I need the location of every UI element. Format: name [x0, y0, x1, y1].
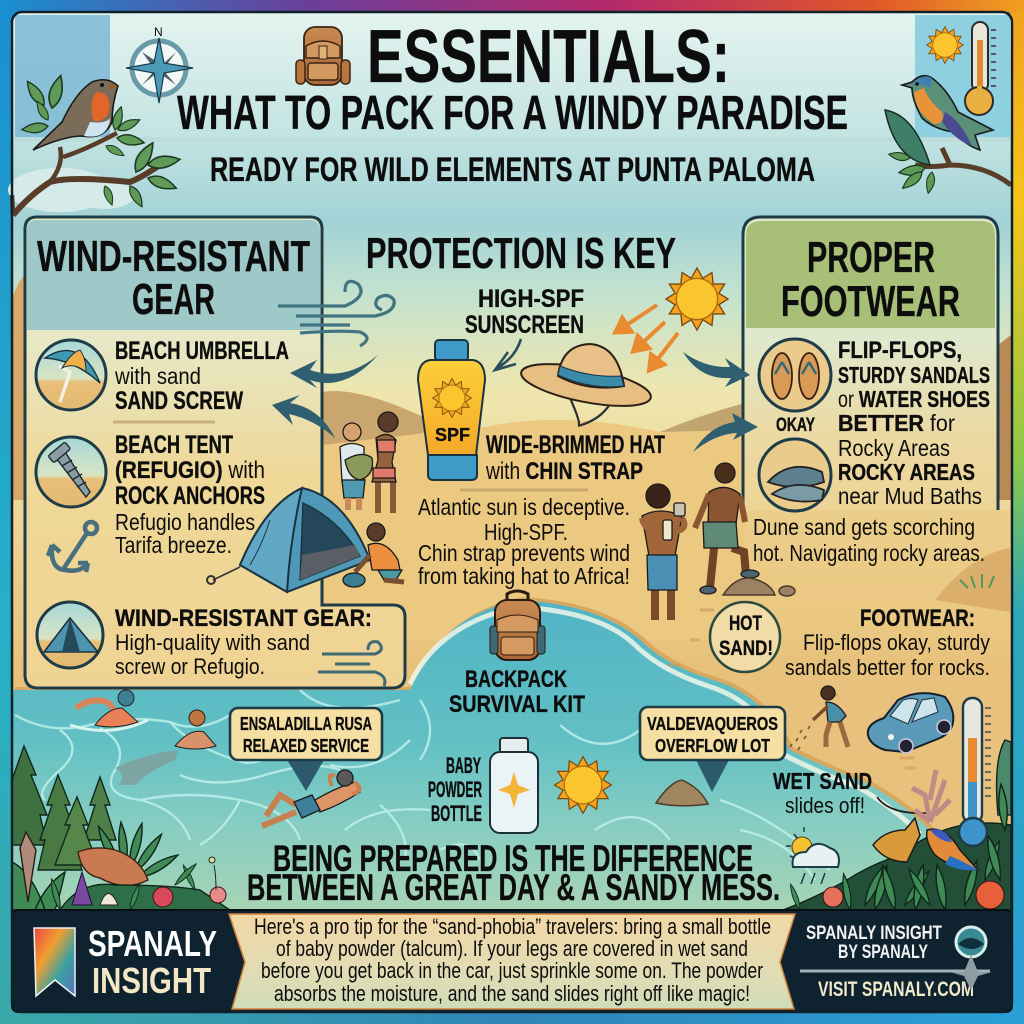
- text: being prepared statement: BETWEEN A GREAT DAY & A SANDY MESS.: [247, 867, 780, 908]
- icon: thermometer right: [959, 698, 991, 846]
- text: wet sand slides off: WET SAND: [773, 768, 872, 794]
- text: beach tent: ROCK ANCHORS: [115, 482, 265, 510]
- text: beach tent: Tarifa breeze.: [115, 532, 232, 558]
- heading: protection is key: PROTECTION IS KEY: [366, 229, 676, 278]
- logo: spanaly circular mark: [950, 927, 992, 990]
- text: wide-brimmed hat: with CHIN STRAP: [485, 458, 643, 485]
- icon: sun over water: [555, 757, 611, 813]
- illustration: bird on branch right: [885, 76, 1011, 194]
- callout: valdevaqueros overflow lot: VALDEVAQUEROS: [647, 714, 778, 734]
- text: beach umbrella: SAND SCREW: [115, 387, 243, 415]
- text: spanaly insight wordmark: [88, 923, 217, 1001]
- icon: backpack in title: [296, 27, 350, 85]
- callout: wind-resistant gear summary: [37, 602, 385, 686]
- arrows: to footwear items: [683, 352, 758, 452]
- text: footwear list: BETTER for: [838, 410, 955, 436]
- callout: hot sand badge: [710, 602, 780, 672]
- text: backpack survival kit: SURVIVAL KIT: [449, 691, 585, 718]
- arrows: sun rays to hat: [622, 305, 678, 364]
- text: wide-brimmed hat: [485, 431, 665, 485]
- text: spanaly insight credit: [800, 923, 990, 1001]
- text: beach umbrella: with sand: [114, 363, 201, 389]
- illustration: person walking on rocks: [695, 463, 759, 594]
- panel: wind-resistant gear: [25, 217, 405, 688]
- logo: spanaly insight ribbon: [34, 928, 75, 996]
- illustration: person sprinkling powder: [790, 686, 848, 750]
- illustration: pine trees and plants left: [12, 746, 230, 911]
- illustration: person anchoring tent: [343, 523, 404, 587]
- illustration: tropical fish: [873, 818, 978, 870]
- illustration: person applying sunscreen: [642, 484, 685, 620]
- text: footwear summary: [785, 605, 990, 680]
- panel: pro tip parchment: of baby powder (talcum). If your legs are covered in wet sand: [276, 936, 748, 961]
- icon: wide-brimmed hat: [518, 344, 654, 426]
- text: footwear list: FLIP-FLOPS,: [838, 337, 962, 364]
- illustration: rock in water: [656, 780, 708, 806]
- icon: small wind: [318, 642, 385, 686]
- callout: valdevaqueros overflow lot: OVERFLOW LOT: [655, 736, 770, 756]
- text: beach tent: [115, 431, 265, 558]
- callout: wind-resistant gear summary: WIND-RESISTANT GEAR:: [115, 605, 372, 632]
- callout: ensaladilla rusa: ENSALADILLA RUSA: [240, 714, 372, 734]
- illustration: coral fish and plants right: [783, 740, 1011, 911]
- text: high-spf sunscreen: [465, 285, 584, 339]
- text: footwear list: Rocky Areas: [838, 435, 950, 461]
- illustration: rocks: [723, 578, 795, 596]
- text: being prepared statement: [247, 838, 780, 908]
- heading: ready for wild elements: READY FOR WILD ELEMENTS AT PUNTA PALOMA: [210, 151, 815, 189]
- illustration: floating person: [262, 770, 360, 826]
- illustration: blue tent: [207, 488, 370, 592]
- footer bar: [12, 910, 1012, 1012]
- text: being prepared statement: BEING PREPARED IS THE DIFFERENCE: [273, 838, 753, 879]
- heading: proper footwear: [781, 233, 960, 326]
- text: high-spf sunscreen: SUNSCREEN: [465, 311, 584, 339]
- text: atlantic sun note: Atlantic sun is deceptive.: [418, 494, 630, 520]
- text: footwear list: near Mud Baths: [838, 483, 982, 509]
- callout: ensaladilla rusa: [230, 708, 382, 791]
- icon: sunscreen bottle: SPF: [435, 425, 470, 445]
- text: spanaly insight wordmark: INSIGHT: [92, 960, 211, 1001]
- panel: pro tip parchment: before you get back in the car, just sprinkle some on. The powder: [261, 958, 763, 983]
- heading: wind-resistant gear: [37, 232, 310, 324]
- text: baby powder bottle label: POWDER: [428, 777, 482, 802]
- illustration: sun and thermometer top right: [927, 22, 996, 115]
- icon: sunscreen bottle: [418, 340, 485, 480]
- text: backpack survival kit: BACKPACK: [465, 666, 567, 693]
- illustration: blue car: [868, 693, 953, 753]
- text: spanaly insight credit: BY SPANALY: [838, 942, 928, 963]
- callout: hot sand badge: SAND!: [719, 637, 773, 660]
- icon: sturdy sandals: [759, 439, 831, 511]
- text: spanaly insight credit: VISIT SPANALY.COM: [818, 978, 974, 1001]
- text: atlantic sun note: Chin strap prevents wind: [418, 540, 630, 566]
- heading: wind-resistant gear: WIND-RESISTANT: [37, 232, 310, 281]
- text: atlantic sun note: [418, 494, 630, 589]
- text: beach tent: (REFUGIO) with: [115, 457, 265, 484]
- text: footwear list: [838, 337, 990, 509]
- text: wide-brimmed hat: WIDE-BRIMMED HAT: [486, 431, 665, 459]
- panel: proper footwear: [743, 217, 998, 511]
- text: footwear list: or WATER SHOES: [838, 386, 990, 412]
- heading: wind-resistant gear: GEAR: [132, 275, 215, 324]
- text: okay label: OKAY: [776, 415, 815, 436]
- text: dune sand note: Dune sand gets scorching: [753, 514, 975, 540]
- text: footwear summary: sandals better for rocks.: [785, 655, 990, 680]
- text: beach tent: BEACH TENT: [115, 431, 233, 459]
- icon: compass: N: [154, 25, 163, 39]
- icon: flip-flops: [759, 339, 831, 411]
- icon: baby powder bottle: [490, 738, 538, 833]
- callout: ensaladilla rusa: RELAXED SERVICE: [243, 736, 369, 756]
- title block: [177, 14, 848, 189]
- icon: mini tent: [37, 602, 103, 668]
- text: atlantic sun note: from taking hat to Africa!: [418, 563, 630, 589]
- icon: anchor: [48, 522, 97, 572]
- text: spanaly insight credit: SPANALY INSIGHT: [806, 923, 942, 944]
- illustration: robin on branch left: [12, 74, 181, 215]
- text: spanaly insight wordmark: SPANALY: [88, 923, 217, 964]
- callout: wind-resistant gear summary: High-quality with sand: [115, 630, 310, 655]
- text: beach tent: Refugio handles: [115, 509, 255, 535]
- text: beach umbrella: [114, 337, 289, 415]
- text: dune sand note: [753, 514, 985, 566]
- text: atlantic sun note: High-SPF.: [484, 519, 568, 545]
- callout: valdevaqueros overflow lot: [640, 707, 785, 792]
- text: baby powder bottle label: BOTTLE: [431, 801, 482, 826]
- illustration: swimmers: [70, 690, 216, 785]
- icon: sun cloud and rain: [786, 827, 839, 884]
- icon: compass: [126, 25, 193, 103]
- text: footwear summary: FOOTWEAR:: [860, 605, 975, 632]
- icon: wind swirl: [278, 281, 394, 346]
- text: beach umbrella: BEACH UMBRELLA: [115, 337, 289, 365]
- icon: beach umbrella: [36, 340, 106, 410]
- text: footwear list: ROCKY AREAS: [838, 459, 975, 485]
- icon: backpack survival kit: [490, 591, 545, 660]
- text: high-spf sunscreen: HIGH-SPF: [478, 285, 584, 313]
- text: baby powder bottle label: [428, 753, 482, 826]
- illustration: couple packing: [340, 412, 398, 513]
- panel: pro tip parchment: Here's a pro tip for the “sand-phobia” travelers: bring a small bottle: [254, 914, 771, 939]
- text: wet sand slides off: slides off!: [785, 793, 865, 818]
- text: footwear summary: Flip-flops okay, sturdy: [803, 630, 990, 655]
- heading: proper footwear: PROPER: [807, 233, 935, 282]
- panel: pro tip parchment: [229, 914, 795, 1009]
- arrow: sunscreen label to bottle: [495, 339, 521, 370]
- text: baby powder bottle label: BABY: [446, 753, 481, 778]
- text: backpack survival kit: [449, 666, 585, 718]
- arrows: to gear items: [272, 355, 378, 438]
- panel: pro tip parchment: absorbs the moisture, and the sand slides right off like magic!: [274, 981, 750, 1006]
- heading: ESSENTIALS: ESSENTIALS:: [367, 14, 730, 98]
- callout: wind-resistant gear summary: screw or Refugio.: [115, 654, 265, 679]
- icon: sand screw: [36, 437, 106, 507]
- text: wet sand slides off: [773, 768, 872, 818]
- icon: sun with rays: [666, 268, 728, 330]
- callout: hot sand badge: HOT: [729, 612, 762, 635]
